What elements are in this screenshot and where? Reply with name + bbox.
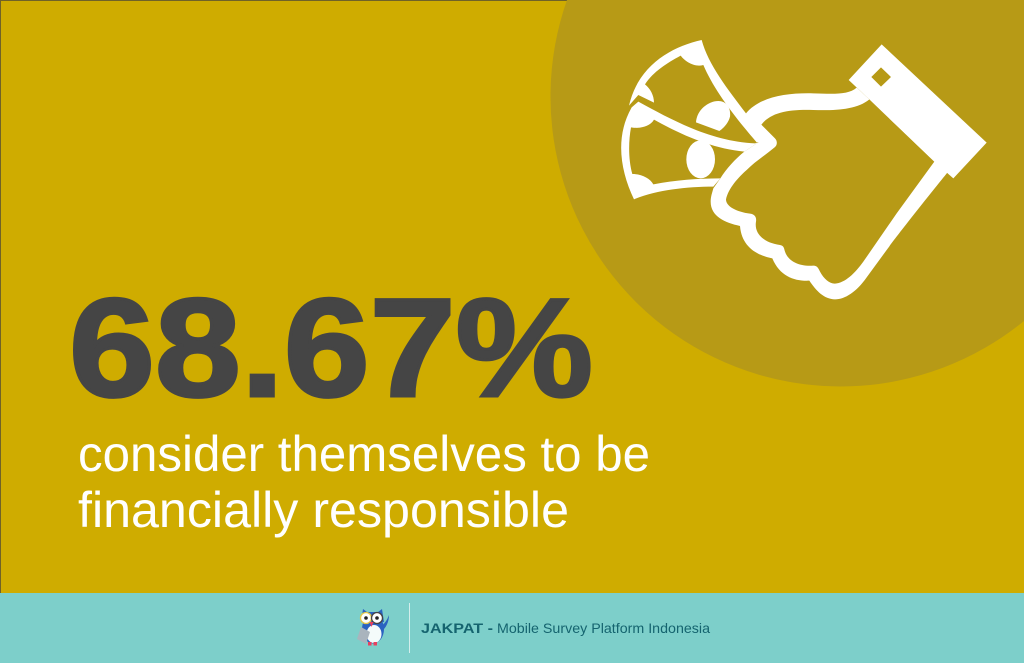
text block: description: consider themselves to be xyxy=(78,426,650,482)
icon: front banknote xyxy=(621,102,758,199)
icon: back banknote oval xyxy=(696,101,730,131)
footer text: Mobile Survey Platform Indonesia xyxy=(497,620,710,636)
icon: owl mascot xyxy=(357,609,389,646)
icon: hand outline xyxy=(711,88,947,299)
divider xyxy=(409,603,410,653)
icon: front banknote oval xyxy=(686,140,715,178)
footer text: JAKPAT - xyxy=(421,621,493,636)
text block: description: financially responsible xyxy=(78,482,569,538)
panel: dark gold circle xyxy=(550,0,1024,386)
statistic: 68.67%: 68.67% xyxy=(69,269,593,426)
icon: sleeve cuff xyxy=(849,44,987,178)
icon: banknotes xyxy=(621,40,762,199)
text block: description xyxy=(78,426,650,538)
icon: back banknote xyxy=(629,40,762,142)
icon: hand holding money xyxy=(621,40,987,299)
panel: footer band xyxy=(0,593,1024,663)
